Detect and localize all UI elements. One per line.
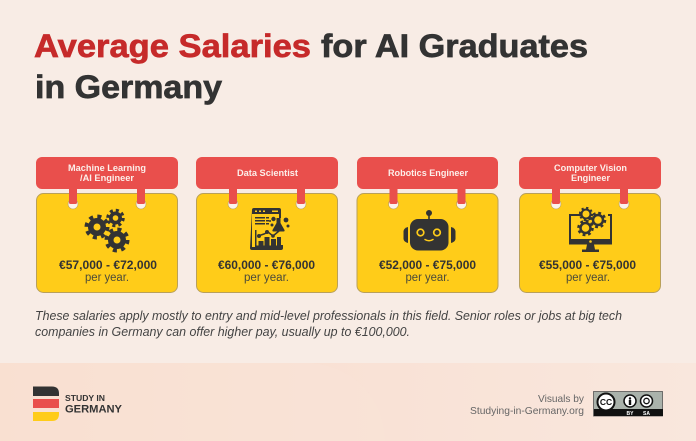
icon: cc by-sa badge <box>594 392 663 417</box>
footer band <box>0 363 696 441</box>
salary: machine learning: per year. <box>85 272 129 284</box>
header: data scientist: Data Scientist <box>237 168 299 179</box>
icon: monitor with gears <box>569 208 612 252</box>
panel: data scientist <box>196 157 338 292</box>
logo: study in germany: STUDY IN <box>65 393 105 403</box>
title <box>34 28 588 105</box>
header: machine learning: /AI Engineer <box>80 173 134 184</box>
credit text <box>470 393 585 417</box>
salary: computer vision engineer <box>539 258 636 284</box>
salary: data scientist: per year. <box>244 272 289 284</box>
icon: cc by-sa badge: SA <box>643 411 650 417</box>
header: computer vision engineer: Engineer <box>571 173 610 184</box>
salary: computer vision engineer: per year. <box>566 272 610 284</box>
note text: companies in Germany can offer higher pay, usually up to €100,000. <box>35 325 410 339</box>
panel: robotics engineer <box>357 157 498 292</box>
credit text: Visuals by <box>538 393 585 405</box>
salary: robotics engineer: per year. <box>406 272 450 284</box>
title: Average Salaries <box>34 28 311 64</box>
icon: cc by-sa badge: CC <box>600 397 612 407</box>
title: for AI Graduates <box>321 28 588 64</box>
panel: machine learning <box>36 157 178 292</box>
salary: data scientist <box>218 258 315 284</box>
header: machine learning <box>36 157 178 189</box>
credit text: Studying-in-Germany.org <box>470 405 584 417</box>
logo: study in germany: GERMANY <box>65 404 123 416</box>
note text: These salaries apply mostly to entry and mid-level professionals in this field. Senior roles or jobs at big tech <box>35 309 622 323</box>
icon: data dashboard <box>250 208 290 250</box>
header: robotics engineer <box>357 157 498 189</box>
header: robotics engineer: Robotics Engineer <box>388 168 468 179</box>
title: in Germany <box>35 69 222 105</box>
salary: robotics engineer: €52,000 - €75,000 <box>379 258 476 272</box>
note text <box>35 309 622 339</box>
salary: computer vision engineer: €55,000 - €75,000 <box>539 258 636 272</box>
icon: cc by-sa badge: BY <box>627 411 634 417</box>
logo: study in germany <box>33 386 123 421</box>
icon: robot <box>404 210 456 250</box>
header: machine learning: Machine Learning <box>68 163 146 174</box>
salary: machine learning: €57,000 - €72,000 <box>59 258 157 272</box>
header: computer vision engineer: Computer Vision <box>554 163 627 174</box>
salary: machine learning <box>59 258 157 284</box>
salary: robotics engineer <box>379 258 476 284</box>
panel: computer vision engineer <box>519 157 661 292</box>
header: computer vision engineer <box>519 157 661 189</box>
icon: gears <box>86 210 128 250</box>
salary: data scientist: €60,000 - €76,000 <box>218 258 315 272</box>
header: data scientist <box>196 157 338 189</box>
